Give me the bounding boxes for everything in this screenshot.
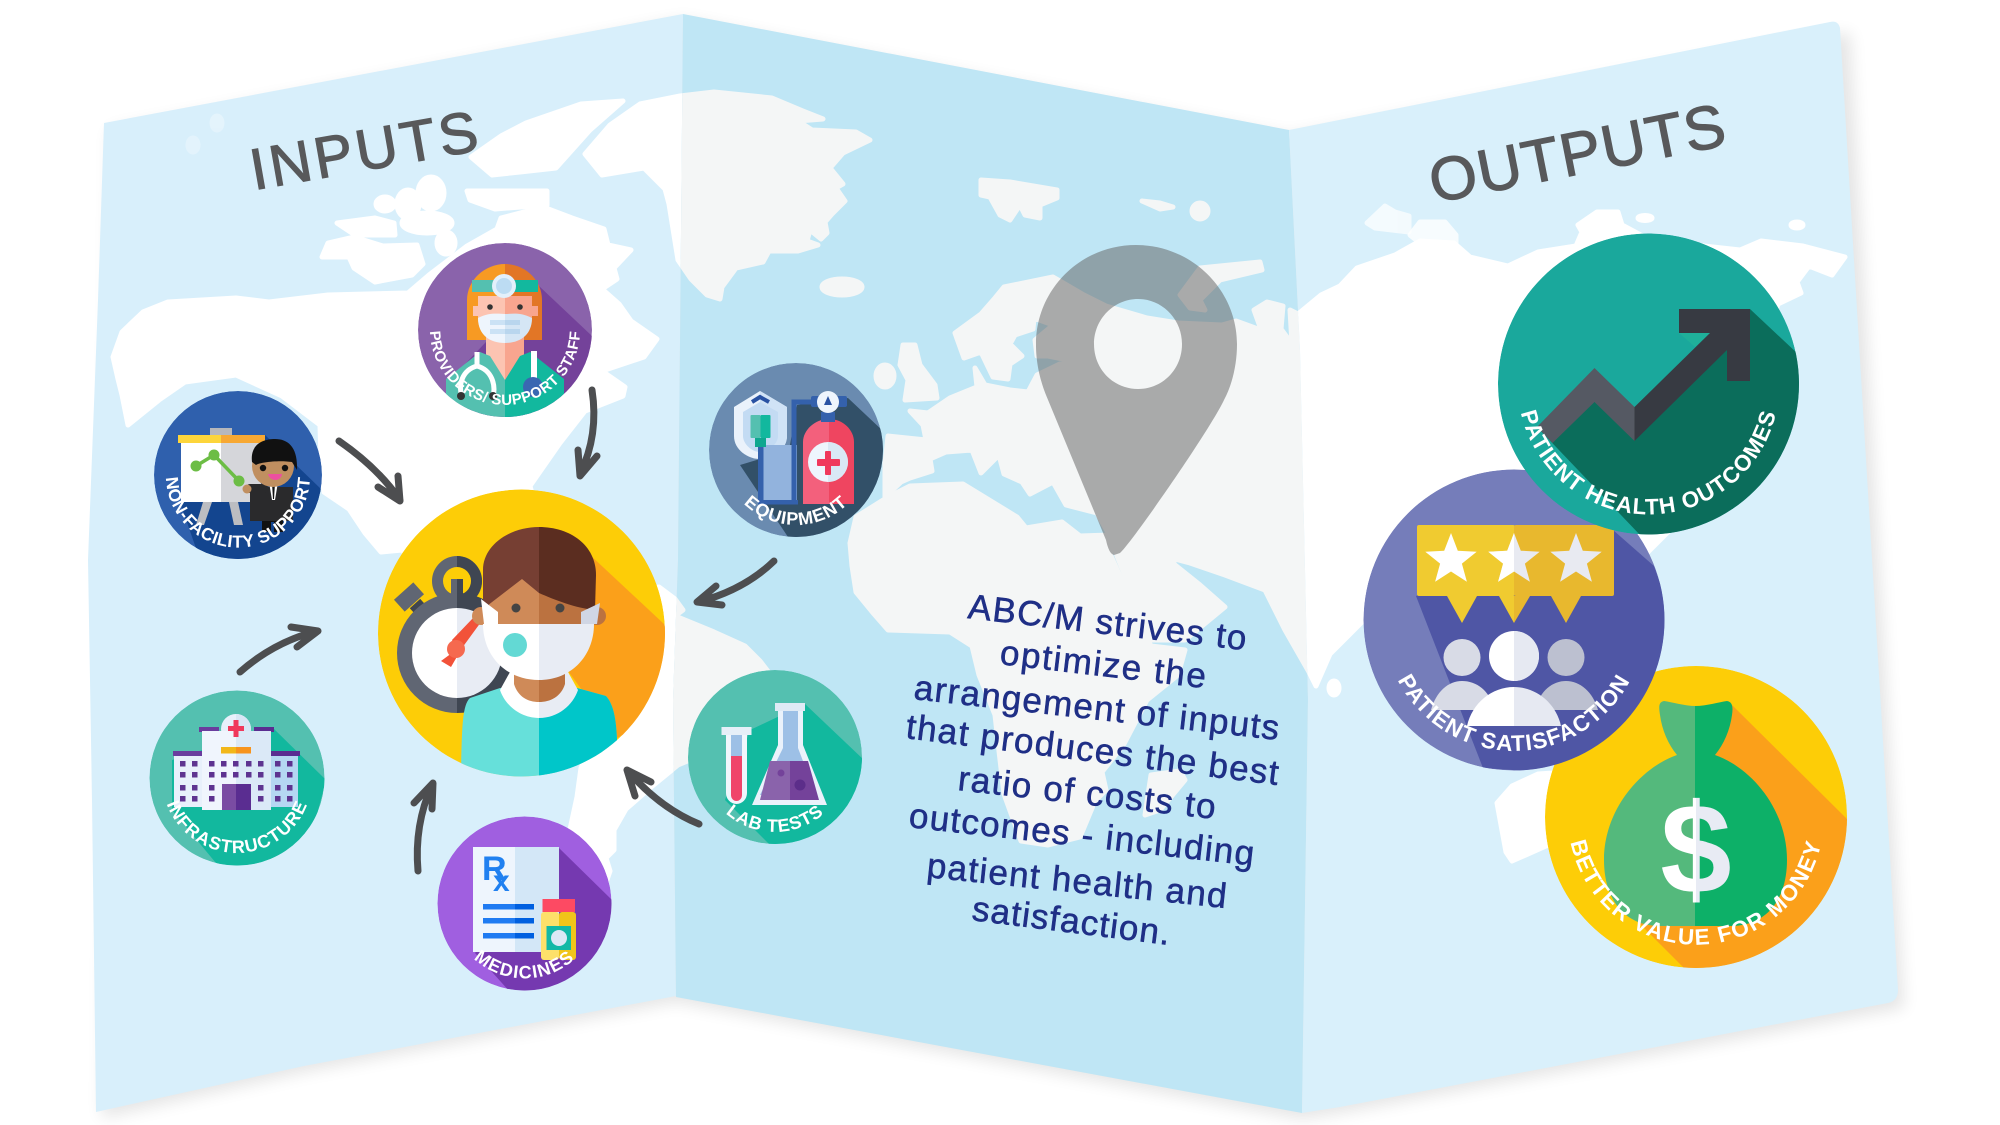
label: lab tests: LAB TESTS [726,804,822,832]
label: providers: PROVIDERS/ SUPPORT STAFF [430,331,580,405]
icon: equipment [709,363,883,537]
icon: patient satisfaction [1364,470,1664,770]
label: equipment: EQUIPMENT [744,495,844,526]
arrow: non-facility to centre [339,441,400,501]
text block: explanation: optimize the [998,633,1208,696]
label: infrastructure: INFRASTRUCTURE [167,800,307,854]
icon: map pin [1036,245,1237,555]
text block: explanation: ABC/M strives to [966,587,1249,658]
icon: better value for money: $ [1660,778,1732,921]
panel: centre map fold [673,14,1308,1113]
panel: left map fold [88,14,683,1112]
label: patient satisfaction: PATIENT SATISFACTION [1398,674,1630,752]
text block: explanation: satisfaction. [970,889,1172,953]
arrow: infrastructure to centre [240,627,318,672]
icon: better value for money [1545,666,1847,968]
icon: providers / support staff [418,243,592,417]
text block: explanation: outcomes - including [907,796,1256,874]
text block: explanation [904,587,1281,953]
icon: lab tests [688,670,862,844]
arrow: lab tests to centre [627,770,699,824]
label: patient health outcomes: PATIENT HEALTH OUTCOMES [1521,410,1775,514]
text block: explanation: patient health and [925,846,1229,916]
icon: central health worker with stopwatch [378,490,665,776]
icon: medicines [438,816,612,990]
label: non-facility support: NON-FACILITY SUPPORT [166,477,310,548]
icon: medicines: R [482,850,507,888]
heading: INPUTS: INPUTS [245,99,483,203]
arrow: medicines to centre [414,783,433,871]
icon: medicines: x [493,865,510,898]
label: better value for money: BETTER VALUE FOR MONEY [1570,840,1820,945]
heading: OUTPUTS: OUTPUTS [1423,91,1731,216]
text block: explanation: that produces the best [904,707,1281,793]
icon: patient health outcomes [1498,234,1799,534]
label: medicines: MEDICINES [474,950,572,978]
icon: non-facility support [154,391,322,559]
text block: explanation: arrangement of inputs [912,668,1281,748]
panel: right map fold [1289,22,1898,1113]
arrow: equipment to centre [697,561,774,605]
icon: infrastructure [150,690,324,866]
text block: explanation: ratio of costs to [956,759,1218,827]
arrow: providers to centre [578,390,597,476]
